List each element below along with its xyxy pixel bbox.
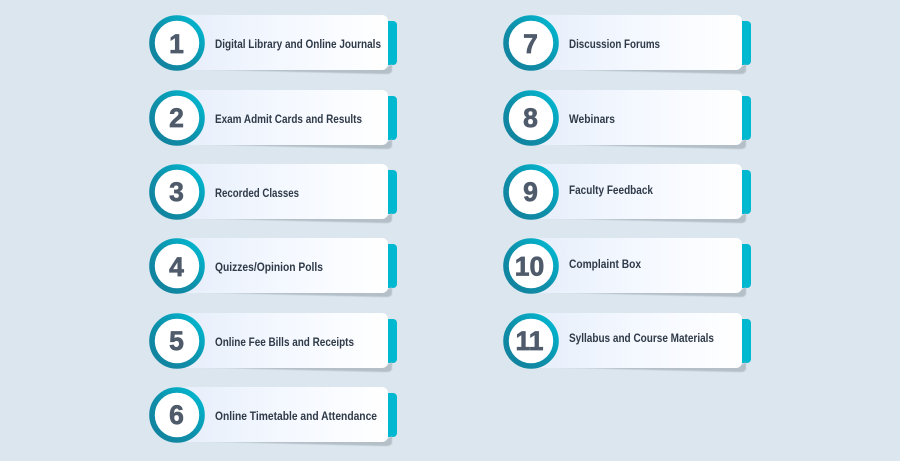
item 2: 2 [169,103,184,133]
item 9: 9 [523,177,538,207]
item 4 [152,238,397,297]
item 7: Discussion Forums [569,37,660,51]
item 2: Exam Admit Cards and Results [215,112,362,126]
item 3: Recorded Classes [215,186,299,200]
item 8: 8 [523,103,538,133]
item 8: Webinars [569,112,615,126]
item 10: Complaint Box [569,257,641,271]
item 4: 4 [169,252,184,282]
item 7: 7 [523,29,538,59]
item 5 [152,313,397,372]
item 11 [506,313,751,372]
item 8 [506,90,751,149]
item 6: 6 [169,400,184,430]
item 6 [152,387,397,446]
item 9: Faculty Feedback [569,183,653,197]
item 4: Quizzes/Opinion Polls [215,260,323,274]
item 3: 3 [169,177,184,207]
item 10 [506,238,751,297]
item 9 [506,164,751,223]
item 11: Syllabus and Course Materials [569,331,714,345]
item 10: 10 [515,252,544,282]
item 1: Digital Library and Online Journals [215,37,381,51]
item 7 [506,15,751,74]
item 5: 5 [169,326,184,356]
item 2 [152,90,397,149]
item 11: 11 [515,326,544,356]
item 1 [152,15,397,74]
item 6: Online Timetable and Attendance [215,409,377,423]
item 3 [152,164,397,223]
item 5: Online Fee Bills and Receipts [215,335,354,349]
item 1: 1 [169,29,184,59]
